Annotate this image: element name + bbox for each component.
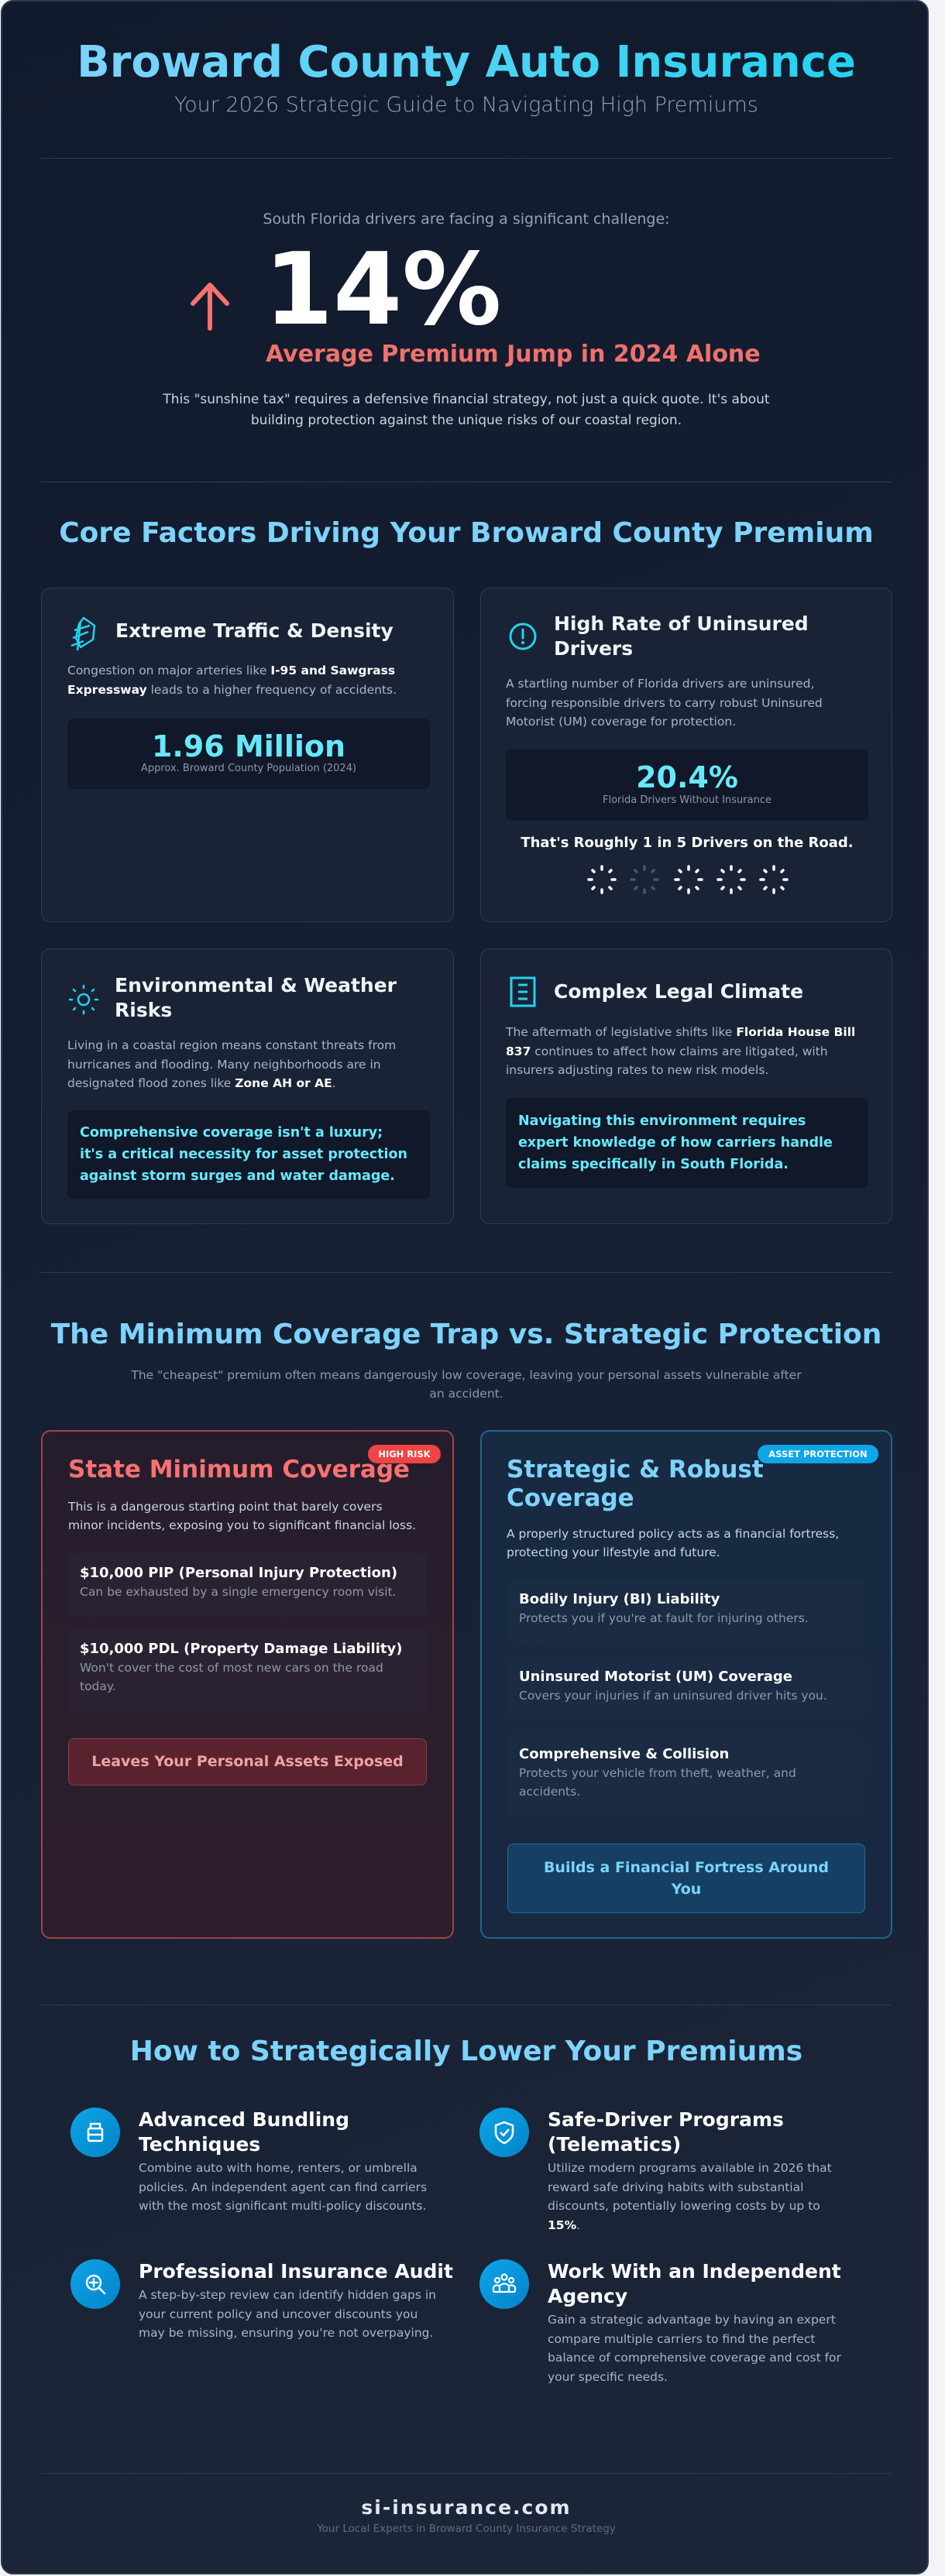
- item: PDL: Won't cover the cost of most new cars on the road today.: [80, 1661, 383, 1693]
- text: This is a dangerous starting point that barely covers: [68, 1500, 383, 1514]
- panel: strategic: [480, 1430, 892, 1939]
- tip: bundling: [70, 2108, 427, 2213]
- title: [554, 612, 809, 660]
- text: The aftermath of legislative shifts like Florida House Bill 837 continues to affect how claims are litigated, with insurers adjusting rates to new risk models.: [506, 1025, 855, 1077]
- callout box: Navigating this environment requires expert knowledge of how carriers handle claims specifically in South Florida.: [518, 1113, 833, 1172]
- stat box: [506, 749, 868, 821]
- text: A startling number of Florida drivers are uninsured, forcing responsible drivers to carry robust Uninsured Motorist (UM) coverage for protection.: [506, 677, 823, 729]
- title: Advanced Bundling: [139, 2108, 349, 2131]
- stat box: Florida Drivers Without Insurance: [603, 794, 771, 806]
- callout box: [506, 1098, 868, 1188]
- panel: traffic: [41, 588, 454, 922]
- text: may be missing, ensuring you're not overpaying.: [139, 2326, 433, 2340]
- stat box: 1.96 Million: [152, 729, 345, 763]
- hero stat block: [163, 211, 770, 428]
- title: Safe-Driver Programs: [548, 2108, 784, 2131]
- tagline: Your Local Experts in Broward County Insurance Strategy: [317, 2523, 616, 2535]
- title: Extreme Traffic & Density: [115, 619, 393, 642]
- button: exposed: Leaves Your Personal Assets Exposed: [91, 1753, 404, 1770]
- stat box: 20.4%: [636, 760, 738, 794]
- item: BI: [507, 1580, 865, 1642]
- item: UM: Uninsured Motorist (UM) Coverage: [519, 1669, 792, 1685]
- text: A properly structured policy acts as a financial fortress, protecting your lifestyle and future.: [507, 1527, 839, 1559]
- intro line: South Florida drivers are facing a significant challenge:: [263, 211, 670, 228]
- footer: [317, 2496, 616, 2535]
- title: Professional Insurance Audit: [139, 2260, 453, 2283]
- callout box: Comprehensive coverage isn't a luxury;: [80, 1125, 383, 1141]
- text: Congestion on major arteries like I-95 and Sawgrass Expressway leads to a higher frequency of accidents.: [67, 664, 397, 697]
- title: Complex Legal Climate: [554, 980, 803, 1003]
- title: Agency: [548, 2285, 627, 2307]
- title: Broward County Auto Insurance: [77, 37, 856, 87]
- icon: traffic: [71, 616, 96, 650]
- icon: shield: [479, 2108, 529, 2157]
- title: Coverage: [507, 1484, 634, 1512]
- icon: people: [479, 2259, 529, 2309]
- description: This "sunshine tax" requires a defensive financial strategy, not just a quick quote. It's about building protection against the unique risks of our coastal region.: [163, 392, 770, 428]
- item: PIP: [68, 1553, 427, 1615]
- button: fortress: You: [672, 1881, 701, 1898]
- title: [548, 2108, 784, 2156]
- icon: document: [510, 977, 536, 1007]
- title: [139, 2108, 349, 2156]
- stat box: Approx. Broward County Population (2024): [141, 763, 356, 774]
- tip: telematics: [479, 2108, 832, 2231]
- website: si-insurance.com: [361, 2496, 572, 2519]
- text: A step-by-step review can identify hidden gaps in: [139, 2288, 436, 2302]
- text: Living in a coastal region means constant threats from hurricanes and flooding. Many neighborhoods are in designated flood zones like Zone AH or AE.: [67, 1038, 396, 1090]
- icon: sun: [68, 985, 99, 1014]
- item: comp: [507, 1735, 865, 1817]
- text: Combine auto with home, renters, or umbrella policies. An independent agent can find carriers with the most significant multi-policy discounts.: [139, 2161, 427, 2213]
- panel: uninsured: [480, 588, 892, 922]
- item: PIP: Can be exhausted by a single emergency room visit.: [80, 1585, 397, 1599]
- item: comp: Comprehensive & Collision: [519, 1746, 729, 1762]
- stat label: Average Premium Jump in 2024 Alone: [266, 341, 761, 368]
- badge: high risk: [368, 1445, 441, 1463]
- panel: legal: [480, 948, 892, 1224]
- title: [115, 974, 397, 1021]
- title: Drivers: [554, 637, 633, 660]
- item: BI: Protects you if you're at fault for injuring others.: [519, 1611, 809, 1625]
- item: UM: Covers your injuries if an uninsured driver hits you.: [519, 1689, 827, 1703]
- panel: state minimum: [41, 1430, 454, 1939]
- big number: 14%: [264, 232, 501, 348]
- tip: agency: [479, 2259, 841, 2383]
- button: fortress: Builds a Financial Fortress Around: [544, 1859, 829, 1876]
- title: Environmental & Weather: [115, 974, 397, 996]
- callout box: [67, 1110, 430, 1199]
- badge: asset protection: [758, 1445, 878, 1463]
- title: High Rate of Uninsured: [554, 612, 809, 635]
- title: Work With an Independent: [548, 2260, 841, 2283]
- title: State Minimum Coverage: [68, 1456, 410, 1484]
- callout box: against storm surges and water damage.: [80, 1168, 395, 1184]
- badge: high risk: HIGH RISK: [378, 1449, 431, 1460]
- icon: bundle: [70, 2108, 120, 2157]
- item: BI: Bodily Injury (BI) Liability: [519, 1591, 720, 1607]
- icon: magnifier: [70, 2259, 120, 2309]
- tip: audit: [70, 2259, 453, 2340]
- heading: core factors: Core Factors Driving Your Broward County Premium: [59, 517, 874, 549]
- title: Risks: [115, 999, 172, 1021]
- icon row: drivers: [587, 865, 789, 894]
- text: [68, 1500, 416, 1532]
- icon: alert: [510, 623, 536, 650]
- item: comp: Protects your vehicle from theft, weather, and accidents.: [519, 1766, 796, 1799]
- text: your current policy and uncover discounts you: [139, 2307, 418, 2321]
- text: Utilize modern programs available in 2026 that reward safe driving habits with substantial discounts, potentially lowering costs by up to 15%.: [548, 2161, 832, 2231]
- subheading: The "cheapest" premium often means dangerously low coverage, leaving your personal assets vulnerable after an accident.: [131, 1368, 802, 1401]
- text: [139, 2288, 436, 2340]
- heading: coverage trap: The Minimum Coverage Trap vs. Strategic Protection: [51, 1319, 881, 1350]
- item: PDL: [68, 1629, 427, 1713]
- heading: lower premiums: How to Strategically Lower Your Premiums: [130, 2036, 802, 2067]
- text: Gain a strategic advantage by having an expert compare multiple carriers to find the perfect balance of comprehensive coverage and cost for your specific needs.: [548, 2313, 841, 2383]
- text: minor incidents, exposing you to significant financial loss.: [68, 1518, 416, 1532]
- callout box: it's a critical necessity for asset protection: [80, 1147, 407, 1162]
- item: PDL: $10,000 PDL (Property Damage Liability): [80, 1641, 402, 1657]
- title: [507, 1456, 764, 1512]
- item: UM: [507, 1658, 865, 1720]
- subtitle: Your 2026 Strategic Guide to Navigating High Premiums: [174, 93, 758, 117]
- stat box: [67, 719, 430, 789]
- panel: weather: [41, 948, 454, 1224]
- title: [548, 2260, 841, 2307]
- icon: up arrow: [191, 283, 229, 331]
- button: exposed: [68, 1738, 427, 1785]
- title: (Telematics): [548, 2133, 681, 2156]
- button: fortress: [507, 1844, 865, 1913]
- title: Strategic & Robust: [507, 1456, 764, 1484]
- callout: That's Roughly 1 in 5 Drivers on the Road.: [521, 835, 854, 851]
- badge: asset protection: ASSET PROTECTION: [768, 1449, 868, 1460]
- item: PIP: $10,000 PIP (Personal Injury Protection): [80, 1565, 397, 1581]
- title: Techniques: [139, 2133, 260, 2156]
